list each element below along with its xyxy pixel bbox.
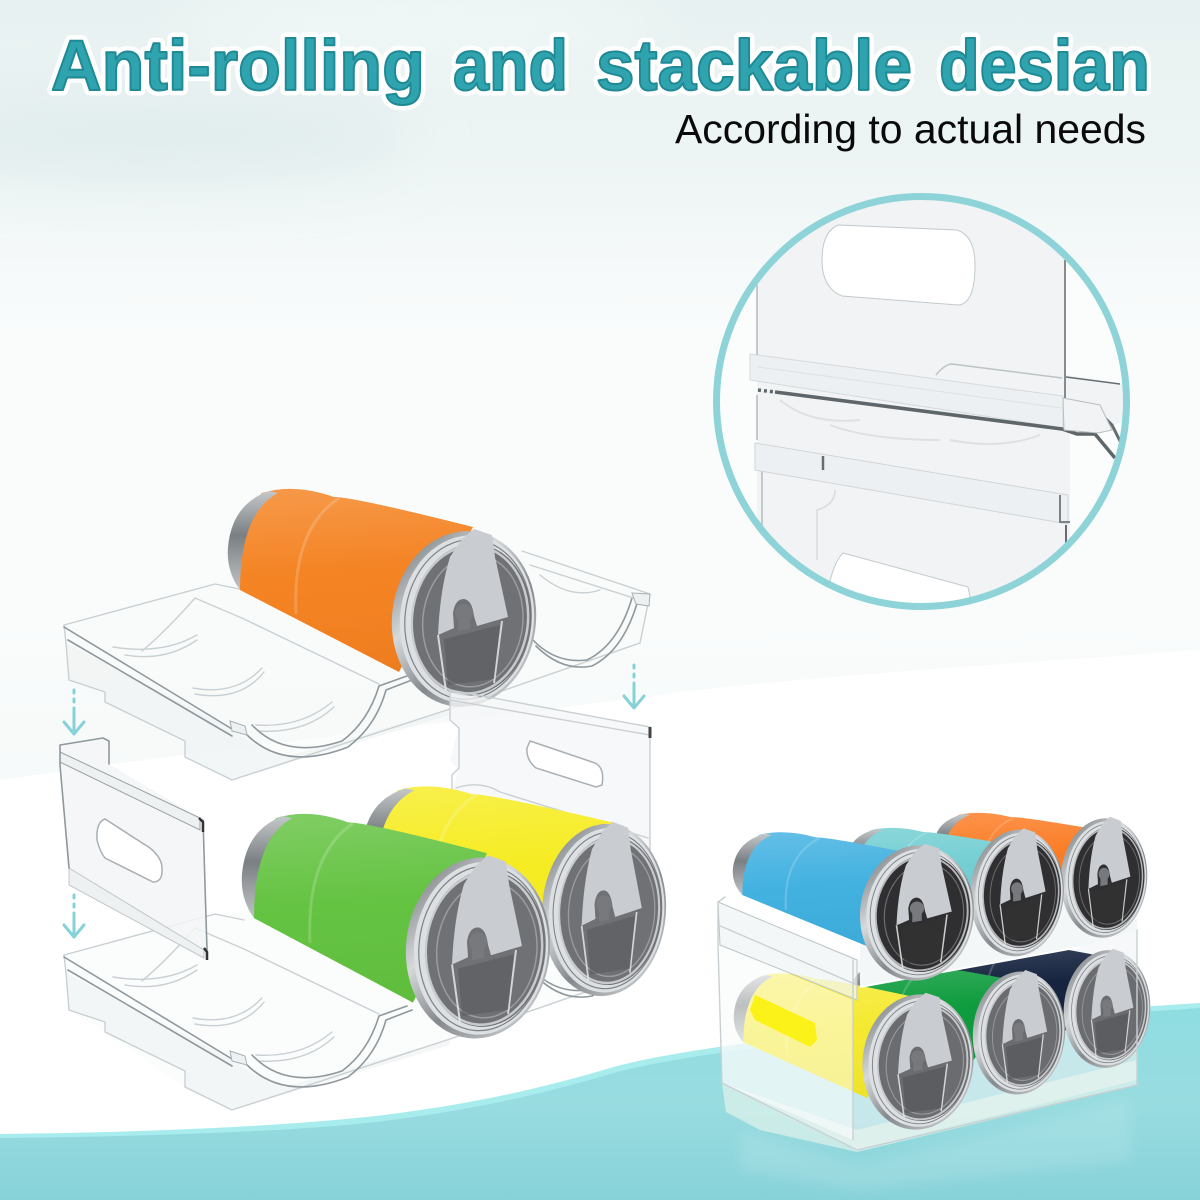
lower tray [64, 881, 650, 1110]
title: Anti-rolling [51, 27, 425, 106]
title: desian [939, 27, 1150, 106]
rack: reflections on the table [740, 1100, 1130, 1190]
panel: right divider wall [450, 690, 650, 880]
arrow: lower left [64, 895, 84, 937]
rack: front rail [718, 897, 857, 1000]
green tumbler [242, 814, 559, 1046]
title: stackable [596, 27, 912, 106]
subtitle: According to actual needs [675, 106, 1146, 152]
title: desian [939, 27, 1150, 106]
tumblers: upper row [733, 813, 1152, 986]
rack: shelf [718, 880, 1137, 1150]
title: stackable [596, 27, 912, 106]
panel: left divider wall [60, 738, 207, 960]
stacked rack with six tumblers [718, 813, 1155, 1190]
title [51, 27, 1150, 106]
rail: lower [755, 443, 1068, 524]
slot: upper handle [822, 225, 975, 305]
yellow tumbler [363, 786, 673, 1003]
title: Anti-rolling [51, 27, 425, 106]
arrow: upper right [624, 665, 644, 708]
tumblers: lower row [734, 937, 1155, 1135]
orange tumbler [228, 489, 545, 714]
title: and [453, 27, 568, 106]
slot: lower handle [830, 552, 970, 600]
rail: upper [750, 354, 1063, 428]
callout: magnified stacking rail [716, 180, 1130, 620]
arrow: upper left [64, 690, 84, 734]
title: and [453, 27, 568, 106]
rack: back box [718, 902, 1137, 1152]
rail: dark edge [775, 392, 1115, 458]
upper tray with orange tumbler [64, 489, 650, 780]
